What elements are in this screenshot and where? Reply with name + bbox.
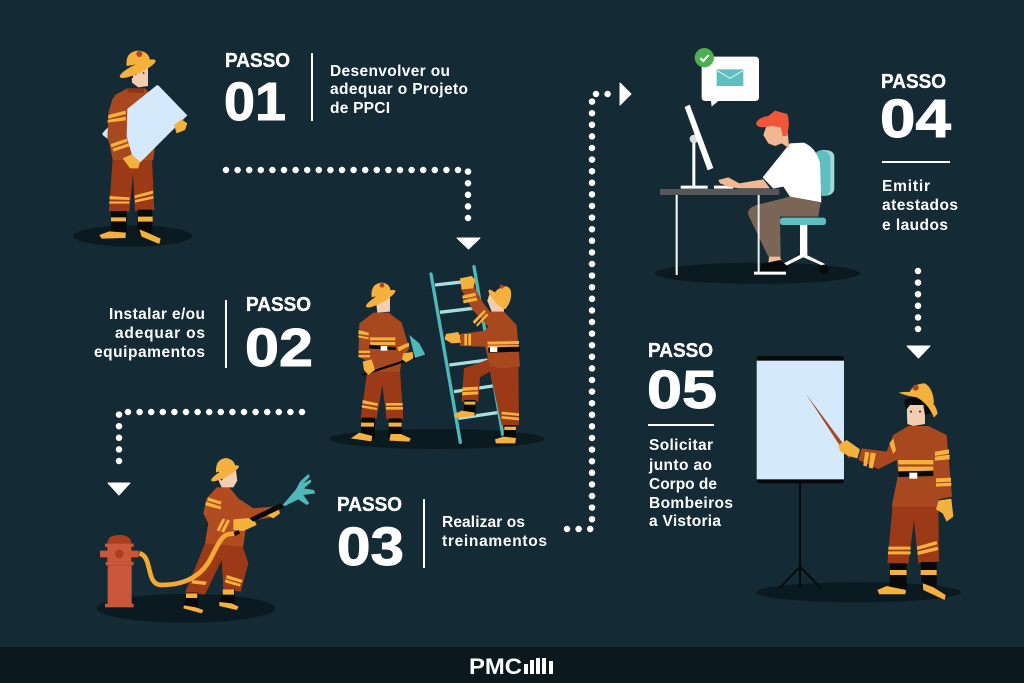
firefighter	[838, 383, 953, 600]
footer bar	[0, 647, 1024, 683]
person	[718, 111, 821, 272]
illustration: firefighter with hose and hydrant	[97, 458, 315, 623]
step 1 text: adequar o Projeto	[330, 81, 468, 98]
monitor	[681, 105, 733, 189]
step 1 text	[330, 63, 468, 117]
step 3 text: treinamentos	[442, 533, 547, 550]
step 5 heading: PASSO	[648, 340, 713, 362]
step 3 text: Realizar os	[442, 514, 525, 531]
step 5 text: Corpo de	[649, 476, 717, 493]
arrow: step 3 to step 4	[567, 83, 631, 529]
step 1 heading: PASSO	[225, 50, 290, 72]
desk	[660, 189, 786, 275]
step 5 text: Bombeiros	[649, 495, 733, 512]
arrow: step 4 to step 5	[907, 271, 930, 358]
pointer	[806, 394, 851, 458]
illustration: firefighter holding plan	[73, 51, 192, 247]
step 5 heading: 05	[647, 360, 717, 420]
step 1 heading	[224, 50, 290, 132]
step 2 text: equipamentos	[94, 344, 205, 361]
flip chart board	[757, 356, 844, 588]
step 4 heading	[880, 71, 951, 149]
step 4 text	[882, 178, 958, 234]
step 5 heading	[647, 340, 717, 420]
step 4 heading: 04	[880, 89, 951, 149]
step 1 text: de PPCI	[330, 100, 390, 117]
water spray	[283, 474, 315, 506]
ladder	[431, 267, 503, 442]
illustration: person at computer	[655, 48, 860, 284]
axe firefighter	[351, 283, 427, 442]
step 5 text: junto ao	[648, 457, 712, 474]
step 1 text: Desenvolver ou	[330, 63, 450, 80]
step 2 heading: 02	[245, 318, 313, 378]
step 4 text: atestados	[882, 197, 958, 214]
step 5 text: Solicitar	[649, 437, 713, 454]
step 2 text	[94, 306, 205, 361]
arrow: step 2 to step 3	[108, 412, 302, 495]
illustration: firefighter presenting at board	[756, 356, 961, 602]
step 1 heading: 01	[224, 72, 286, 132]
firefighter	[139, 458, 284, 613]
chair	[780, 150, 834, 274]
logo	[469, 654, 553, 679]
step 4 text: e laudos	[882, 217, 948, 234]
logo: PMC	[469, 654, 522, 679]
step 3 text	[442, 514, 547, 550]
step 5 text	[648, 437, 733, 530]
climbing firefighter	[446, 276, 520, 443]
step 3 heading: 03	[337, 517, 404, 577]
step 4 text: Emitir	[882, 178, 930, 195]
step 3 heading: PASSO	[337, 494, 402, 516]
hydrant	[100, 535, 139, 607]
step 3 heading	[337, 494, 404, 577]
step 2 text: adequar os	[115, 325, 205, 342]
step 5 text: a Vistoria	[649, 513, 721, 530]
step 2 text: Instalar e/ou	[109, 306, 205, 323]
arrow: step 1 to step 2	[226, 170, 480, 249]
speech bubble with envelope	[695, 48, 759, 107]
step 2 heading	[245, 294, 313, 378]
step 2 heading: PASSO	[246, 294, 311, 316]
step 4 heading: PASSO	[881, 71, 946, 93]
illustration: firefighter with axe and firefighter on ladder	[329, 267, 544, 449]
